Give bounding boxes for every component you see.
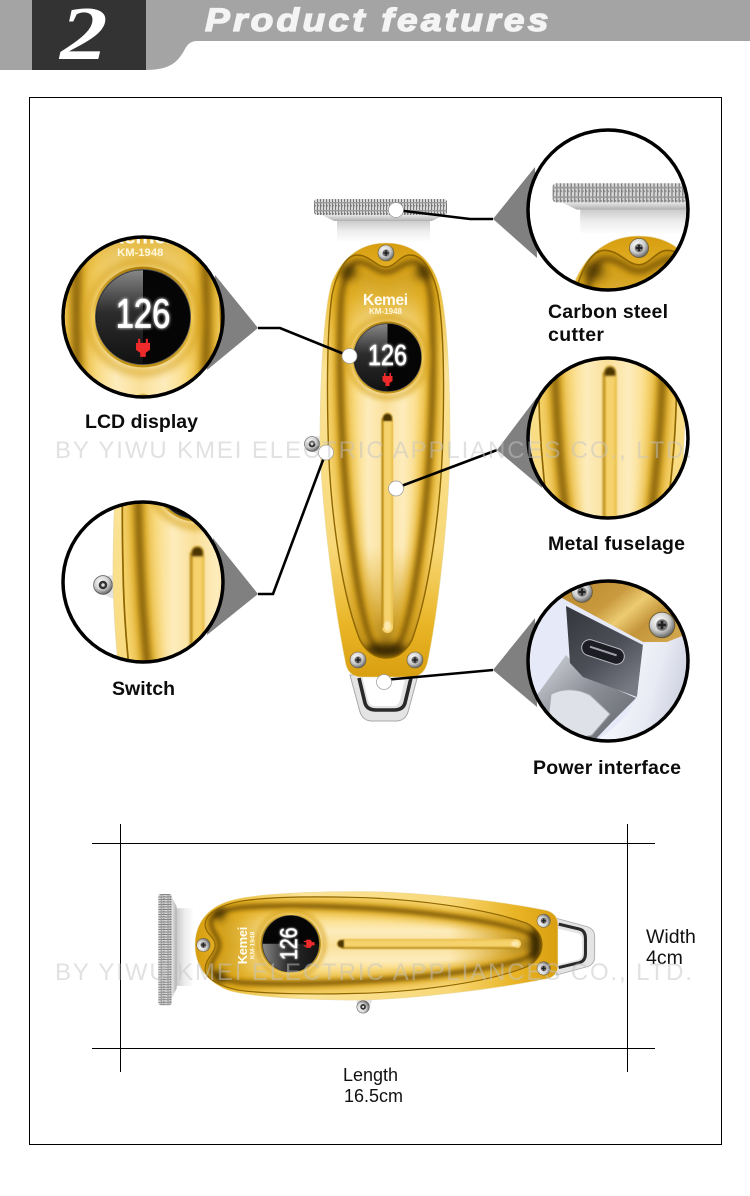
side-view trimmer: 126: [276, 927, 303, 960]
marker dots: [318, 202, 404, 690]
label: switch: Switch: [112, 678, 175, 700]
side-view trimmer: [158, 891, 595, 1013]
label: carbon steel cutter: cutter: [548, 324, 604, 346]
width label: [646, 926, 696, 969]
title: Product features: [205, 3, 548, 38]
watermark bottom: BY YIWU KMEI ELECTRIC APPLIANCES CO., LTD.: [55, 959, 692, 986]
main trimmer: 126: [368, 340, 407, 372]
length label: Length: [343, 1065, 398, 1085]
width label: Width: [646, 926, 696, 948]
label: LCD display: LCD display: [85, 411, 198, 433]
main trimmer: KM-1948: [369, 307, 403, 316]
main trimmer: [304, 199, 450, 721]
section number badge: [32, 0, 146, 76]
watermark top: BY YIWU KMEI ELECTRIC APPLIANCES CO., LTD.: [55, 437, 692, 464]
label: carbon steel cutter: Carbon steel: [548, 301, 668, 323]
label: metal fuselage: Metal fuselage: [548, 533, 685, 555]
width label: 4cm: [646, 947, 683, 969]
callout: metal fuselage: [402, 356, 690, 520]
callout: switch: [61, 459, 324, 664]
callout: LCD display: Kemei: [109, 224, 172, 249]
callout: carbon steel cutter: [404, 128, 690, 292]
header band: [0, 0, 750, 76]
side-view trimmer: Kemei: [235, 927, 250, 964]
callout: LCD display: KM-1948: [117, 247, 163, 259]
callout: LCD display: [61, 235, 343, 399]
callout: LCD display: 126: [116, 291, 170, 337]
side-view trimmer: KM-1948: [249, 931, 256, 959]
label: carbon steel cutter: [548, 301, 668, 346]
main trimmer: Kemei: [363, 292, 408, 309]
callout: power interface: [384, 575, 695, 745]
dimension lines: [92, 824, 655, 1072]
label: power interface: Power interface: [533, 757, 681, 779]
length label: 16.5cm: [344, 1086, 403, 1106]
length label: [343, 1065, 403, 1106]
